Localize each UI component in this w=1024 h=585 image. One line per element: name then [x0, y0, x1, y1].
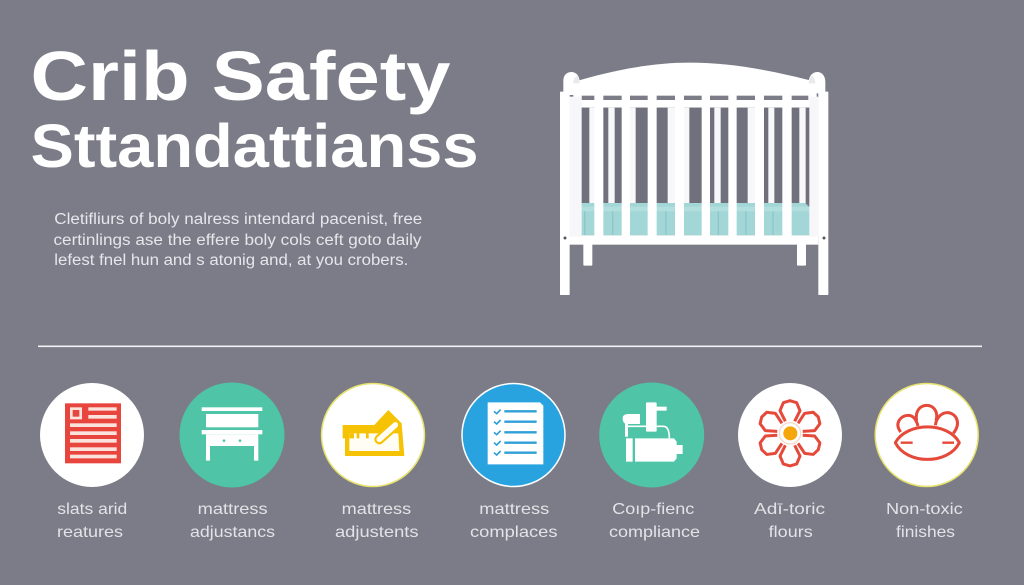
icon: checklist [488, 402, 543, 464]
label [57, 501, 127, 541]
intro text block: lefest fnel hun and s atonig and, at you crobers. [54, 252, 408, 269]
label: adjustancs [190, 524, 275, 541]
back slats [589, 108, 806, 204]
icon: red outline shell [895, 405, 959, 459]
upper rail gaps [582, 96, 808, 100]
label: complaces [470, 524, 558, 541]
label: mattress [479, 501, 549, 518]
circle [180, 382, 284, 488]
feature: non-toxic finishes [875, 384, 978, 541]
mattress [576, 203, 810, 235]
label: mattress [198, 501, 268, 518]
intro text block [54, 211, 422, 269]
label [754, 501, 825, 541]
label: Non-toxic [886, 501, 963, 518]
label [470, 501, 558, 541]
bottom rail [569, 235, 818, 245]
label: finishes [896, 524, 955, 541]
rail bolts [563, 236, 825, 239]
icon: white table [202, 407, 262, 461]
circle [322, 384, 424, 486]
illustration: white crib with teal mattress [560, 63, 828, 295]
title [30, 37, 478, 180]
crib opening [582, 108, 809, 204]
title: Crib Safety [30, 37, 451, 115]
circle [738, 383, 842, 487]
feature: slats [40, 383, 144, 541]
label [886, 501, 963, 541]
icon: red document [65, 403, 121, 463]
label: slats arid [57, 501, 127, 518]
circle [599, 382, 704, 488]
right post [809, 72, 828, 295]
icon: yellow ruler and pencil [343, 410, 404, 456]
label [609, 501, 700, 541]
label: Coıp-fienc [612, 501, 694, 518]
label: mattress [342, 501, 411, 518]
label: flours [769, 524, 813, 541]
circle [875, 384, 978, 486]
label [190, 501, 275, 541]
feature: compliance [599, 382, 704, 541]
front slats [594, 100, 792, 237]
label: Adī-toric [754, 501, 825, 518]
feature: mattress adjustancs [180, 382, 284, 541]
circle [462, 384, 565, 486]
label [335, 501, 418, 541]
label: compliance [609, 524, 700, 541]
title: Sttandattianss [30, 112, 478, 180]
inner legs [583, 243, 806, 266]
icon: red flower [757, 401, 823, 466]
left post [560, 72, 582, 295]
feature: mattress complaces [462, 384, 565, 541]
feature: flours [738, 383, 842, 541]
intro text block: Cletifliurs of boly nalress intendard pacenist, free [54, 211, 422, 228]
feature: mattress adjustents [322, 384, 424, 541]
crib headboard [573, 63, 817, 108]
label: reatures [57, 524, 123, 541]
divider [38, 346, 982, 347]
icon: plug and battery [623, 402, 683, 462]
intro text block: certinlings ase the effere boly cols ceft goto daily [54, 232, 422, 249]
circle [40, 383, 144, 487]
label: adjustents [335, 524, 418, 541]
